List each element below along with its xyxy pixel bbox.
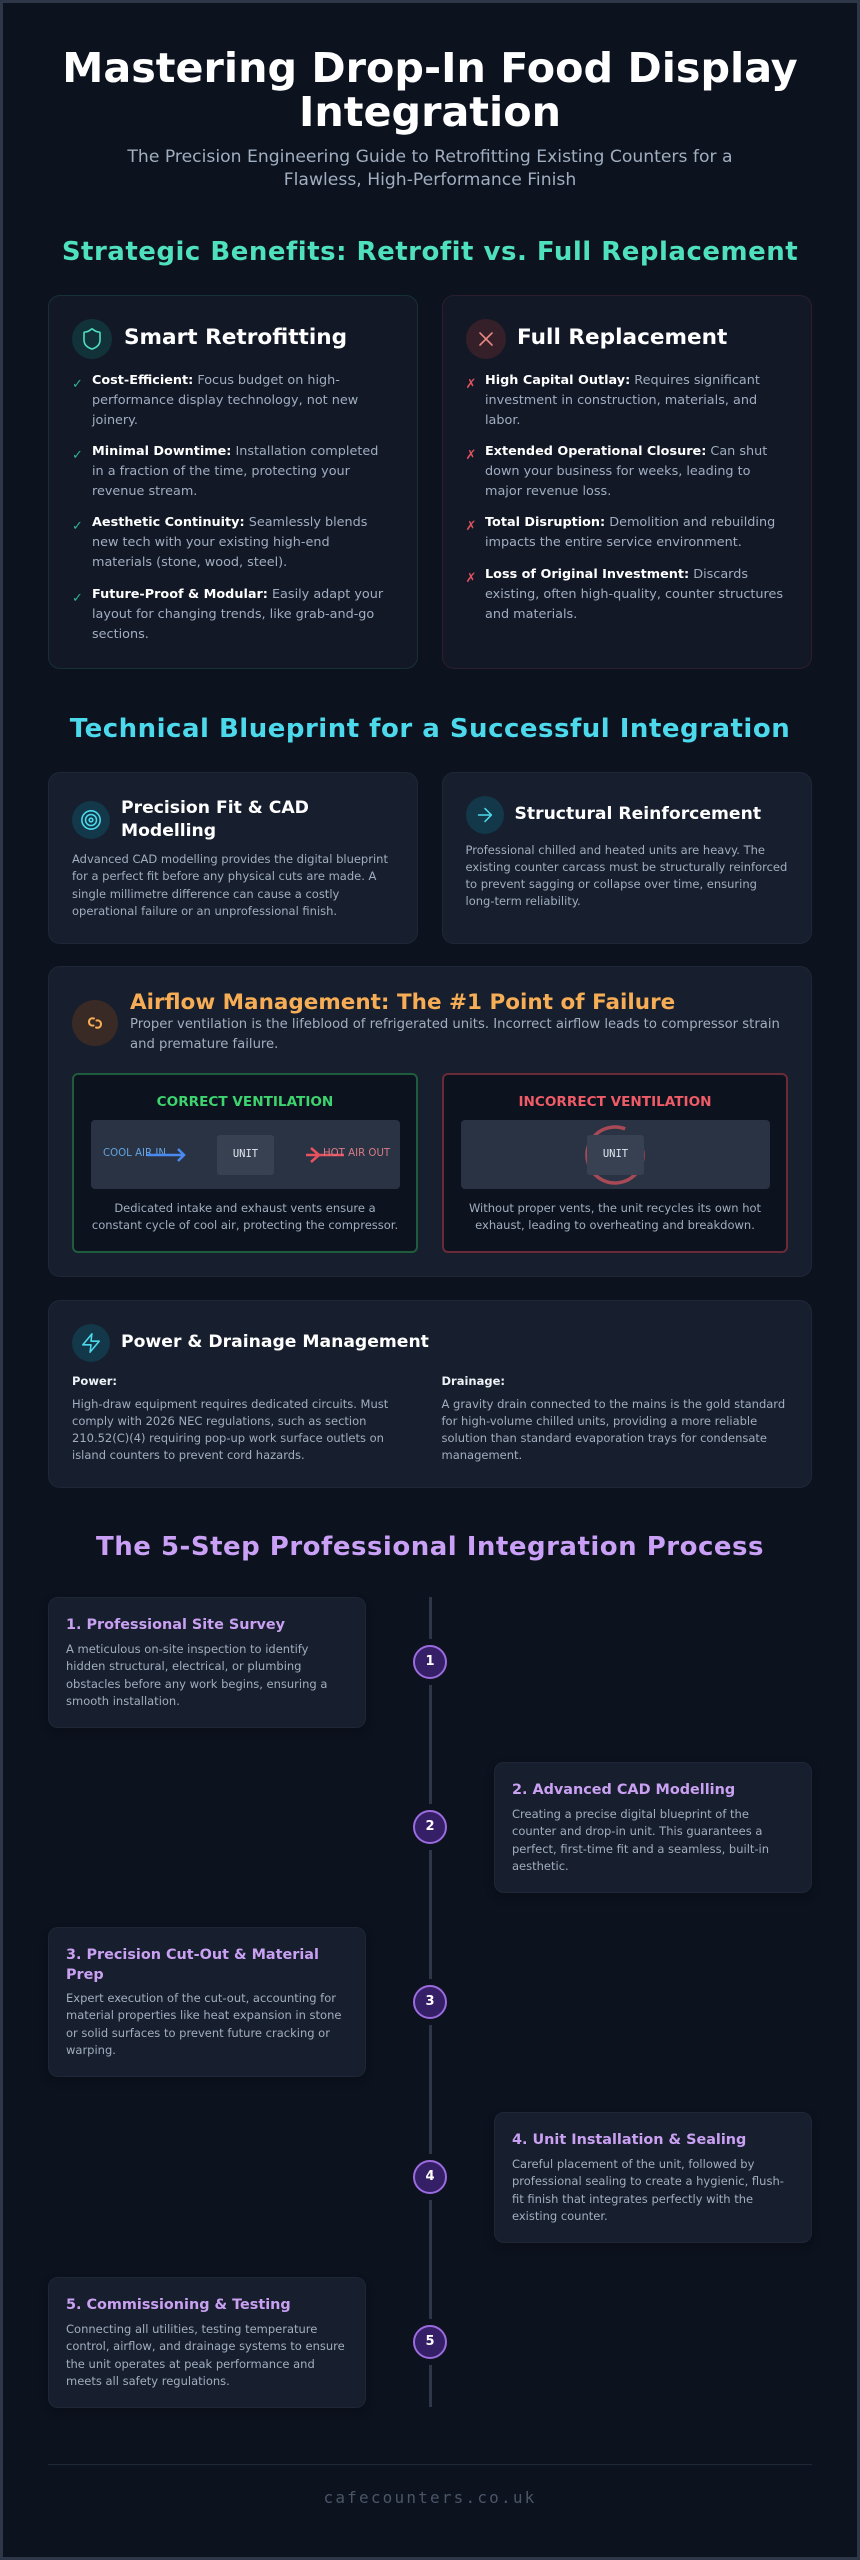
drawback: total disruption: impacts the entire service environment. bbox=[485, 535, 742, 550]
airflow diagram: incorrect bbox=[461, 1120, 770, 1189]
drawback: extended closure: Extended Operational Closure: Can shut bbox=[485, 444, 767, 459]
step text: warping. bbox=[66, 2043, 116, 2057]
step marker 3: 3 bbox=[425, 1994, 435, 2009]
step text: the unit operates at peak performance and bbox=[66, 2356, 315, 2370]
drainage text: for high-volume chilled units, providing a more reliable bbox=[442, 1414, 757, 1428]
description: and premature failure. bbox=[130, 1037, 278, 1052]
footer rule bbox=[48, 2464, 812, 2465]
drainage label: Drainage: bbox=[442, 1374, 505, 1388]
panel: full replacement bbox=[442, 295, 812, 669]
panel heading: Precision Fit & CAD bbox=[121, 798, 309, 818]
benefit: future-proof: sections. bbox=[92, 627, 149, 642]
drawback: extended closure: down your business for weeks, leading to bbox=[485, 464, 750, 479]
drawback: high capital outlay: labor. bbox=[485, 413, 521, 428]
step text: hidden structural, electrical, or plumbing bbox=[66, 1659, 302, 1673]
step text: material properties like heat expansion in stone bbox=[66, 2008, 341, 2022]
benefit: aesthetic continuity: Aesthetic Continuity: Seamlessly blends bbox=[92, 515, 367, 530]
panel heading bbox=[121, 798, 309, 840]
step 4 card bbox=[494, 2112, 812, 2243]
panel: power and drainage bbox=[48, 1300, 812, 1488]
benefit: cost-efficient: performance display technology, not new bbox=[92, 393, 358, 408]
subtitle bbox=[127, 147, 733, 190]
step marker 4: 4 bbox=[425, 2169, 435, 2184]
icon: arrow right bbox=[466, 796, 504, 834]
step text: aesthetic. bbox=[512, 1859, 569, 1873]
step 2 card bbox=[494, 1762, 812, 1893]
correct caption: constant cycle of cool air, protecting the compressor. bbox=[92, 1218, 398, 1232]
correct caption bbox=[92, 1201, 398, 1232]
heading: technical blueprint: Technical Blueprint for a Successful Integration bbox=[70, 714, 790, 744]
benefit: aesthetic continuity: materials (stone, wood, steel). bbox=[92, 555, 287, 570]
icon: lightning bbox=[72, 1324, 110, 1362]
unit box bbox=[217, 1135, 274, 1175]
step text bbox=[512, 1807, 769, 1873]
drainage text: solution than standard evaporation trays for condensate bbox=[442, 1431, 767, 1445]
body text: Professional chilled and heated units are heavy. The bbox=[466, 842, 765, 856]
step text: professional sealing to create a hygienic, flush- bbox=[512, 2174, 784, 2188]
step text: meets all safety regulations. bbox=[66, 2374, 230, 2388]
step marker 2 bbox=[413, 1810, 447, 1844]
body text: to prevent sagging or collapse over time, ensuring bbox=[466, 877, 757, 891]
subtitle: Flawless, High-Performance Finish bbox=[284, 170, 576, 190]
timeline line bbox=[428, 1597, 432, 2407]
recirculation ring bbox=[585, 1125, 645, 1185]
incorrect caption: Without proper vents, the unit recycles its own hot bbox=[469, 1201, 761, 1215]
body text: single millimetre difference can cause a costly bbox=[72, 887, 339, 901]
correct heading: CORRECT VENTILATION bbox=[157, 1094, 333, 1110]
body text bbox=[466, 842, 787, 908]
drawback: high capital outlay: High Capital Outlay: Requires significant bbox=[485, 373, 760, 388]
arrow: cool air bbox=[147, 1148, 186, 1162]
benefit: future-proof bbox=[92, 587, 384, 642]
step title bbox=[66, 1947, 319, 1983]
power text bbox=[72, 1396, 388, 1462]
step title: 1. Professional Site Survey bbox=[66, 1617, 285, 1633]
label: cool air in: COOL AIR IN bbox=[103, 1148, 166, 1159]
step text bbox=[66, 1642, 327, 1708]
panel: correct ventilation bbox=[72, 1073, 418, 1253]
panel heading: Airflow Management: The #1 Point of Failure bbox=[130, 990, 675, 1015]
unit box bbox=[587, 1135, 644, 1175]
drawback: loss of investment: Loss of Original Investment: Discards bbox=[485, 567, 748, 582]
panel: smart retrofitting bbox=[48, 295, 418, 669]
benefit: future-proof: layout for changing trends, like grab-and-go bbox=[92, 607, 374, 622]
drainage text: A gravity drain connected to the mains is the gold standard bbox=[442, 1396, 785, 1410]
step marker 1: 1 bbox=[425, 1654, 435, 1669]
label: hot air out: HOT AIR OUT bbox=[323, 1148, 390, 1159]
unit box: UNIT bbox=[603, 1148, 628, 1160]
panel heading: Structural Reinforcement bbox=[514, 804, 761, 824]
check: future-proof: ✓ bbox=[72, 591, 83, 606]
heading: strategic benefits: Strategic Benefits: Retrofit vs. Full Replacement bbox=[62, 237, 798, 267]
benefit: aesthetic continuity: new tech with your existing high-end bbox=[92, 535, 330, 550]
step text bbox=[66, 1991, 341, 2057]
drainage text bbox=[442, 1396, 785, 1462]
step text: Expert execution of the cut-out, accounting for bbox=[66, 1991, 336, 2005]
body text: operational failure or an unprofessional finish. bbox=[72, 904, 337, 918]
icon: airflow bbox=[72, 1000, 118, 1046]
power text: 210.52(C)(4) requiring pop-up work surface outlets on bbox=[72, 1431, 384, 1445]
step marker 5: 5 bbox=[425, 2334, 435, 2349]
body text: long-term reliability. bbox=[466, 894, 581, 908]
icon: x mark bbox=[466, 319, 506, 359]
correct caption: Dedicated intake and exhaust vents ensure a bbox=[114, 1201, 376, 1215]
cross: total disruption: ✗ bbox=[466, 519, 476, 534]
cross: extended closure: ✗ bbox=[466, 448, 476, 463]
benefit: cost-efficient: joinery. bbox=[92, 413, 138, 428]
icon: target bbox=[72, 801, 110, 839]
benefit: future-proof: Future-Proof & Modular: Easily adapt your bbox=[92, 587, 383, 602]
power label: Power: bbox=[72, 1374, 117, 1388]
step marker 3 bbox=[413, 1985, 447, 2019]
heading: integration process: The 5-Step Professional Integration Process bbox=[96, 1532, 764, 1562]
arrow: hot air bbox=[306, 1147, 344, 1163]
drainage text: management. bbox=[442, 1448, 522, 1462]
benefit: minimal downtime bbox=[92, 444, 378, 499]
drawback: high capital outlay bbox=[485, 373, 760, 428]
power text: comply with 2026 NEC regulations, such as section bbox=[72, 1414, 366, 1428]
panel: precision fit bbox=[48, 772, 418, 944]
step text: Connecting all utilities, testing temperature bbox=[66, 2322, 317, 2336]
body text: existing counter carcass must be structurally reinforced bbox=[466, 860, 787, 874]
step marker 1 bbox=[413, 1645, 447, 1679]
panel heading: Power & Drainage Management bbox=[121, 1332, 429, 1352]
benefit: cost-efficient: Cost-Efficient: Focus budget on high- bbox=[92, 373, 340, 388]
step text bbox=[512, 2157, 784, 2223]
step marker 2: 2 bbox=[425, 1819, 435, 1834]
step title: 3. Precision Cut-Out & Material bbox=[66, 1947, 319, 1963]
check: cost-efficient: ✓ bbox=[72, 377, 83, 392]
description: Proper ventilation is the lifeblood of refrigerated units. Incorrect airflow leads to compressor strain bbox=[130, 1017, 780, 1032]
power text: island counters to prevent cord hazards. bbox=[72, 1448, 305, 1462]
check: minimal downtime: ✓ bbox=[72, 448, 83, 463]
step text: obstacles before any work begins, ensuring a bbox=[66, 1676, 327, 1690]
panel: airflow management bbox=[48, 966, 812, 1277]
step text: or solid surfaces to prevent future cracking or bbox=[66, 2026, 330, 2040]
panel heading: Modelling bbox=[121, 820, 216, 840]
step text: Creating a precise digital blueprint of the bbox=[512, 1807, 749, 1821]
icon: shield bbox=[72, 319, 112, 359]
step text: smooth installation. bbox=[66, 1694, 180, 1708]
drawback: total disruption bbox=[485, 515, 775, 550]
drawback: loss of investment bbox=[485, 567, 783, 622]
drawback: loss of investment: existing, often high-quality, counter structures bbox=[485, 587, 783, 602]
step text: Careful placement of the unit, followed by bbox=[512, 2157, 754, 2171]
power text: High-draw equipment requires dedicated circuits. Must bbox=[72, 1396, 388, 1410]
benefit: minimal downtime: revenue stream. bbox=[92, 484, 197, 499]
cross: loss of investment: ✗ bbox=[466, 571, 476, 586]
drawback: total disruption: Total Disruption: Demolition and rebuilding bbox=[485, 515, 775, 530]
step text bbox=[66, 2322, 345, 2388]
step marker 5 bbox=[413, 2325, 447, 2359]
benefit: minimal downtime: in a fraction of the time, protecting your bbox=[92, 464, 350, 479]
unit box: UNIT bbox=[233, 1148, 258, 1160]
body text bbox=[72, 852, 388, 918]
body text: Advanced CAD modelling provides the digital blueprint bbox=[72, 852, 388, 866]
step 5 card bbox=[48, 2277, 366, 2408]
title: Integration bbox=[299, 88, 561, 136]
drawback: extended closure bbox=[485, 444, 767, 499]
title bbox=[62, 44, 798, 136]
step text: counter and drop-in unit. This guarantees a bbox=[512, 1824, 762, 1838]
airflow diagram: correct bbox=[91, 1120, 400, 1189]
step title: 2. Advanced CAD Modelling bbox=[512, 1782, 735, 1798]
step title: 5. Commissioning & Testing bbox=[66, 2297, 291, 2313]
panel: structural reinforcement bbox=[442, 772, 812, 944]
step text: existing counter. bbox=[512, 2209, 608, 2223]
step title: 4. Unit Installation & Sealing bbox=[512, 2132, 746, 2148]
benefit: cost-efficient bbox=[92, 373, 358, 428]
subtitle: The Precision Engineering Guide to Retrofitting Existing Counters for a bbox=[127, 147, 733, 167]
incorrect caption: exhaust, leading to overheating and breakdown. bbox=[475, 1218, 755, 1232]
check: aesthetic continuity: ✓ bbox=[72, 519, 83, 534]
step text: perfect, first-time fit and a seamless, built-in bbox=[512, 1842, 769, 1856]
step text: fit finish that integrates perfectly with the bbox=[512, 2192, 753, 2206]
benefit: aesthetic continuity bbox=[92, 515, 367, 570]
benefit: minimal downtime: Minimal Downtime: Installation completed bbox=[92, 444, 378, 459]
drawback: high capital outlay: investment in construction, materials, and bbox=[485, 393, 757, 408]
description bbox=[130, 1017, 780, 1052]
incorrect caption bbox=[469, 1201, 761, 1232]
title: Mastering Drop-In Food Display bbox=[62, 44, 798, 92]
cross: high capital: ✗ bbox=[466, 377, 476, 392]
incorrect heading: INCORRECT VENTILATION bbox=[518, 1094, 712, 1110]
step text: A meticulous on-site inspection to identify bbox=[66, 1642, 308, 1656]
panel: incorrect ventilation bbox=[442, 1073, 788, 1253]
step title: Prep bbox=[66, 1967, 104, 1983]
drawback: loss of investment: and materials. bbox=[485, 607, 577, 622]
footer text: cafecounters.co.uk bbox=[324, 2488, 536, 2507]
step 3 card bbox=[48, 1927, 366, 2077]
panel heading: Smart Retrofitting bbox=[124, 325, 347, 350]
panel heading: Full Replacement bbox=[517, 325, 727, 350]
step 1 card bbox=[48, 1597, 366, 1728]
drawback: extended closure: major revenue loss. bbox=[485, 484, 611, 499]
step text: control, airflow, and drainage systems to ensure bbox=[66, 2339, 345, 2353]
body text: for a perfect fit before any physical cuts are made. A bbox=[72, 869, 376, 883]
step marker 4 bbox=[413, 2160, 447, 2194]
